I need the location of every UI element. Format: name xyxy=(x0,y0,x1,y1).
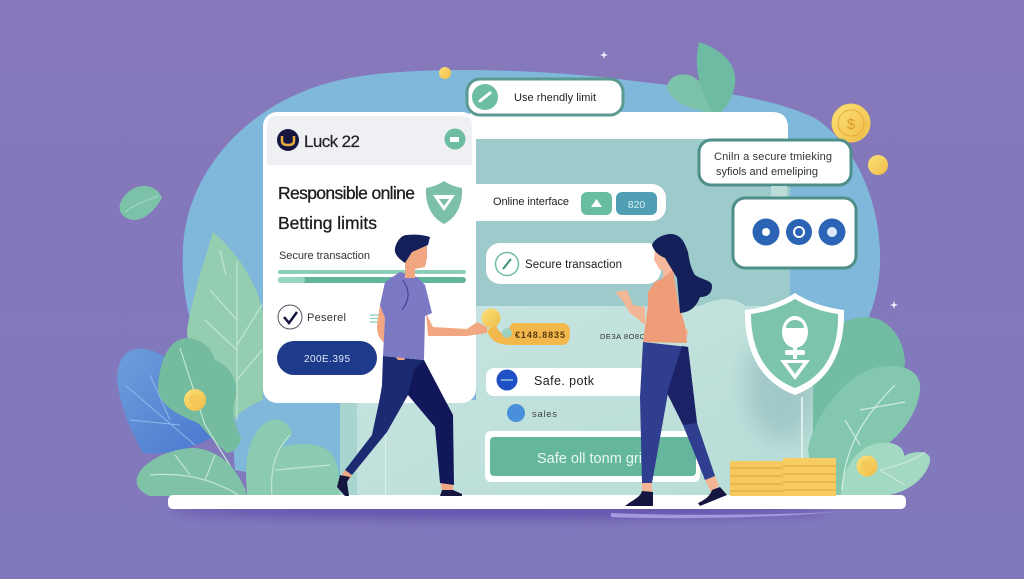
header icon xyxy=(444,128,466,150)
sales row: sales xyxy=(532,409,557,420)
coins: top xyxy=(439,67,888,175)
head xyxy=(405,246,427,278)
hair xyxy=(652,234,712,313)
sales row xyxy=(507,404,557,422)
amount button: 200E.395 xyxy=(304,354,350,365)
panel: safe row xyxy=(486,368,656,396)
person: man xyxy=(337,235,487,496)
shirt xyxy=(380,272,432,360)
check option xyxy=(278,305,379,329)
icon: shield xyxy=(426,181,462,224)
leaves: right group xyxy=(808,317,930,496)
gold amount tag: €148.8835 xyxy=(515,330,565,340)
ankles xyxy=(642,476,719,493)
head xyxy=(654,246,677,280)
torso xyxy=(643,270,687,343)
base platform xyxy=(168,495,906,509)
hair xyxy=(395,235,430,263)
logo xyxy=(277,129,299,151)
value button xyxy=(616,192,657,215)
heading: Responsible online xyxy=(278,183,415,203)
brand name: Luck 22 xyxy=(304,132,360,151)
subheading: Secure transaction xyxy=(279,250,370,262)
blue backdrop blob xyxy=(183,70,880,490)
coins: top: $ xyxy=(847,116,856,133)
coin stacks xyxy=(730,458,836,496)
amount button xyxy=(277,341,377,375)
arm xyxy=(615,290,645,325)
gold amount tag xyxy=(482,308,570,345)
lower panel xyxy=(340,299,813,496)
value button: 820 xyxy=(628,199,645,211)
leaves: left group xyxy=(117,186,340,496)
trousers: front leg xyxy=(408,360,454,485)
check option: Peserel xyxy=(307,312,346,324)
trousers: back leg xyxy=(345,356,424,475)
leaf: bottom left xyxy=(137,448,247,496)
panel: secure transaction row xyxy=(486,243,661,284)
legs xyxy=(640,342,715,483)
progress bars xyxy=(278,270,466,283)
callout: secure tracking: Cniln a secure tmieking xyxy=(714,151,832,163)
leaf: round green xyxy=(158,338,245,490)
feet xyxy=(337,475,462,496)
heading xyxy=(278,183,415,233)
panel: online interface row xyxy=(440,184,666,221)
leaf: tall xyxy=(187,232,263,425)
small code label: DE3A 8O8C xyxy=(600,332,646,341)
ankles xyxy=(342,470,453,491)
panel: main card xyxy=(263,112,476,403)
shield with lock xyxy=(745,293,844,395)
icon button: green xyxy=(581,192,612,215)
callout: secure tracking: syfiols and emeliping xyxy=(716,166,818,178)
leaf: floating xyxy=(120,186,162,220)
leaf: bottom middle xyxy=(246,420,340,496)
feet xyxy=(625,491,653,506)
panel: secure transaction row: Secure transaction xyxy=(525,259,622,271)
safe button xyxy=(485,431,700,482)
pill: friendly limit xyxy=(467,79,623,115)
panel: main interface xyxy=(340,112,818,496)
card header xyxy=(267,116,472,165)
ground shadow xyxy=(170,501,833,519)
sparkles xyxy=(600,51,898,309)
hip hand xyxy=(678,325,688,343)
safe button: Safe oll tonm gri xyxy=(537,451,642,467)
panel: icons card xyxy=(733,198,856,268)
person: woman xyxy=(615,234,727,506)
coin on leaf xyxy=(184,389,206,411)
connector xyxy=(771,186,787,197)
back arm xyxy=(377,305,405,360)
leaf: blue xyxy=(117,348,212,454)
pill: friendly limit: Use rhendly limit xyxy=(514,92,596,104)
panel: online interface row: Online interface xyxy=(493,196,569,208)
callout: secure tracking xyxy=(699,140,851,185)
panel: safe row: Safe. potk xyxy=(534,374,595,388)
leaves: top xyxy=(667,42,735,116)
front arm xyxy=(426,313,487,336)
heading: Betting limits xyxy=(278,213,377,233)
